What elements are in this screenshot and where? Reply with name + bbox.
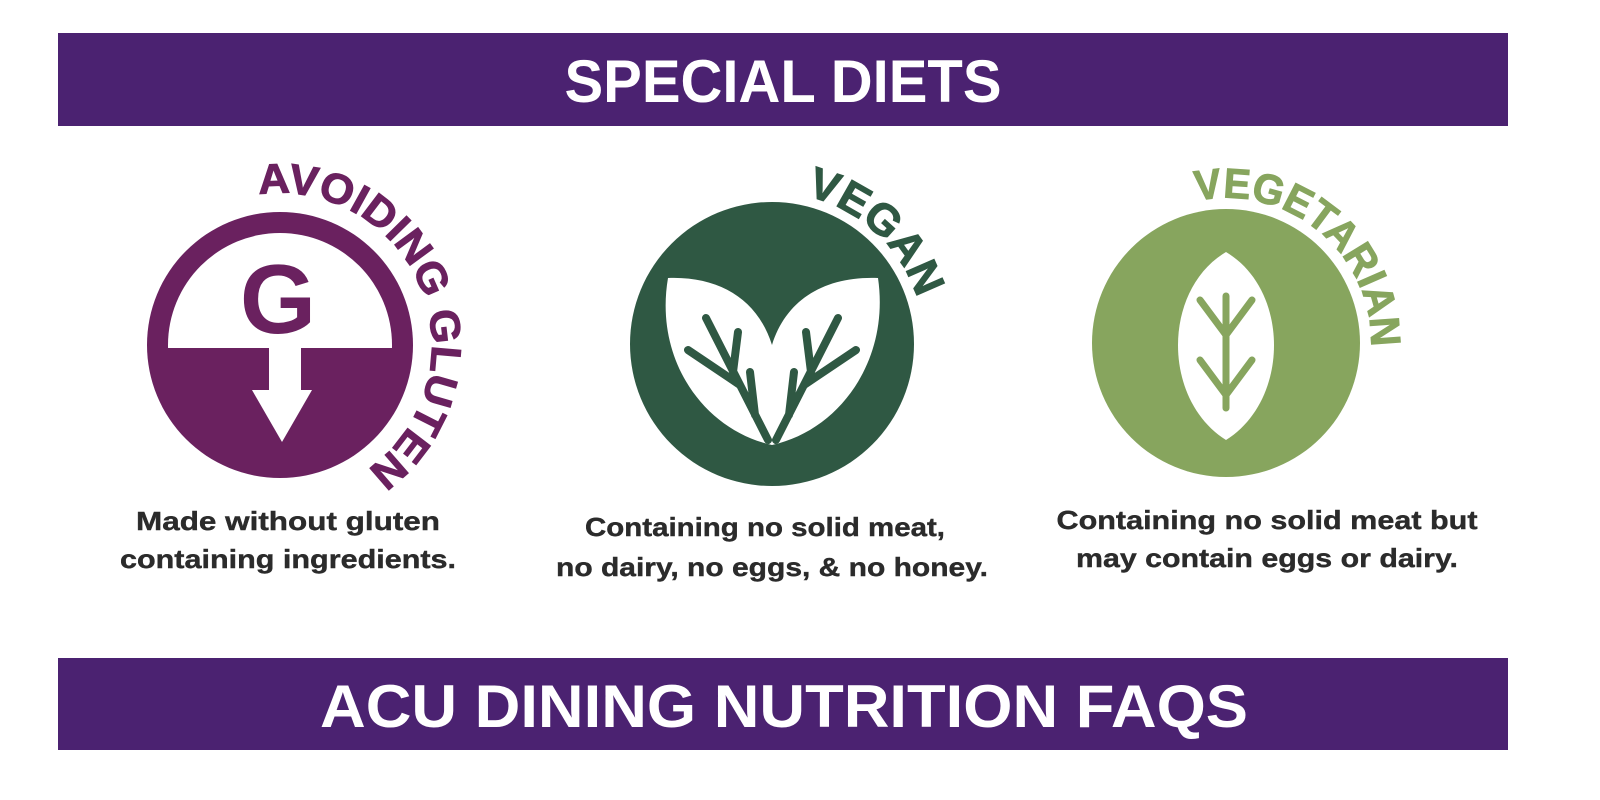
text: gluten description: Made without gluten — [136, 506, 440, 536]
text: vegetarian description: Containing no solid meat but — [1056, 505, 1478, 535]
footer bar: ACU dining nutrition FAQs: ACU DINING NUTRITION FAQS — [320, 673, 1248, 740]
text: gluten description — [120, 506, 456, 574]
text: vegan description: no dairy, no eggs, & no honey. — [556, 552, 988, 582]
icon: vegetarian — [1092, 168, 1401, 477]
icon: avoiding gluten — [147, 163, 462, 491]
text: vegetarian description: may contain eggs or dairy. — [1076, 543, 1458, 573]
icon: vegan — [630, 166, 946, 486]
text: vegan description — [556, 512, 988, 582]
title bar: special diets: SPECIAL DIETS — [564, 48, 1002, 115]
text: vegan description: Containing no solid meat, — [585, 512, 945, 542]
title bar: special diets — [58, 33, 1508, 126]
icon: avoiding gluten: G — [240, 244, 316, 354]
text: vegetarian description — [1056, 505, 1478, 573]
icon: vegetarian: VEGETARIAN — [1192, 168, 1401, 345]
text: gluten description: containing ingredients. — [120, 544, 456, 574]
icon: avoiding gluten: AVOIDING GLUTEN — [259, 163, 462, 491]
icon: vegan: VEGAN — [815, 166, 946, 296]
footer bar: ACU dining nutrition FAQs — [58, 658, 1508, 750]
